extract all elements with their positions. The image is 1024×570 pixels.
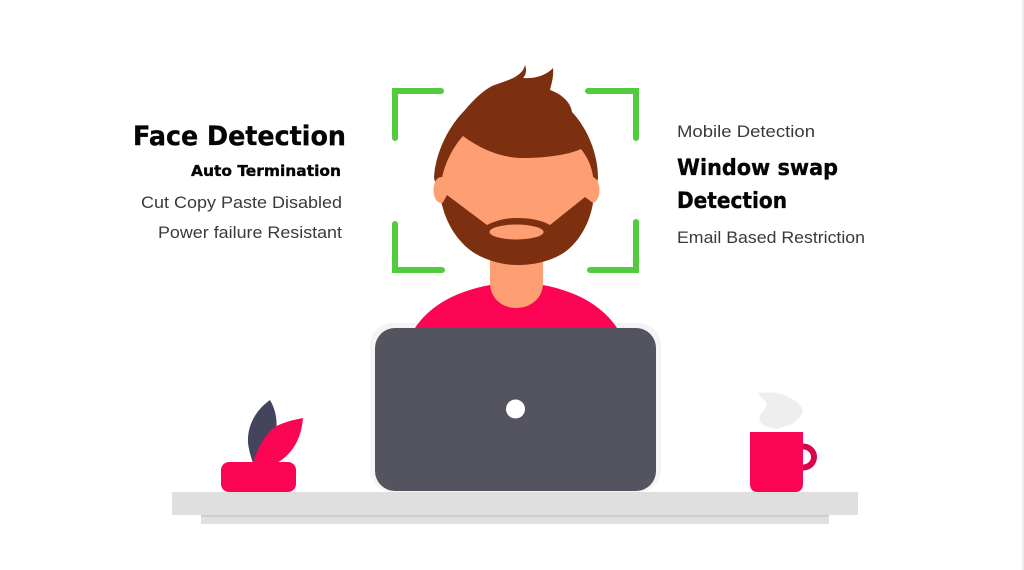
- cup: [750, 432, 803, 492]
- beard: [442, 195, 593, 265]
- person: [415, 65, 617, 328]
- cut copy paste disabled: Cut Copy Paste Disabled: [141, 193, 342, 212]
- left feature list: [133, 121, 346, 242]
- email based restriction: Email Based Restriction: [677, 228, 865, 247]
- handle: [792, 446, 814, 468]
- face detection frame: [395, 91, 636, 270]
- heading: window swap detection: Detection: [677, 189, 787, 214]
- heading: window swap detection: Window swap: [677, 156, 838, 181]
- left ear: [434, 177, 448, 203]
- laptop logo dot: [506, 400, 525, 418]
- auto termination: Auto Termination: [191, 162, 341, 180]
- plant: [221, 400, 303, 492]
- coffee mug: [750, 392, 814, 492]
- pot: [221, 462, 296, 492]
- neck: [490, 250, 543, 308]
- desk: [172, 492, 858, 524]
- power failure resistant: Power failure Resistant: [158, 223, 342, 242]
- pink leaf: [252, 418, 303, 466]
- heading: window swap detection: [677, 156, 838, 214]
- steam: [758, 392, 803, 429]
- mobile detection: Mobile Detection: [677, 122, 815, 141]
- heading: face detection: Face Detection: [133, 121, 346, 152]
- right ear: [584, 177, 600, 203]
- hair: [434, 65, 598, 215]
- shirt: [415, 285, 617, 328]
- mouth: [490, 224, 544, 240]
- laptop shadow: [370, 323, 661, 492]
- face: [442, 136, 594, 235]
- dark leaf: [248, 400, 277, 463]
- laptop: [375, 328, 656, 491]
- right feature list: [677, 122, 865, 247]
